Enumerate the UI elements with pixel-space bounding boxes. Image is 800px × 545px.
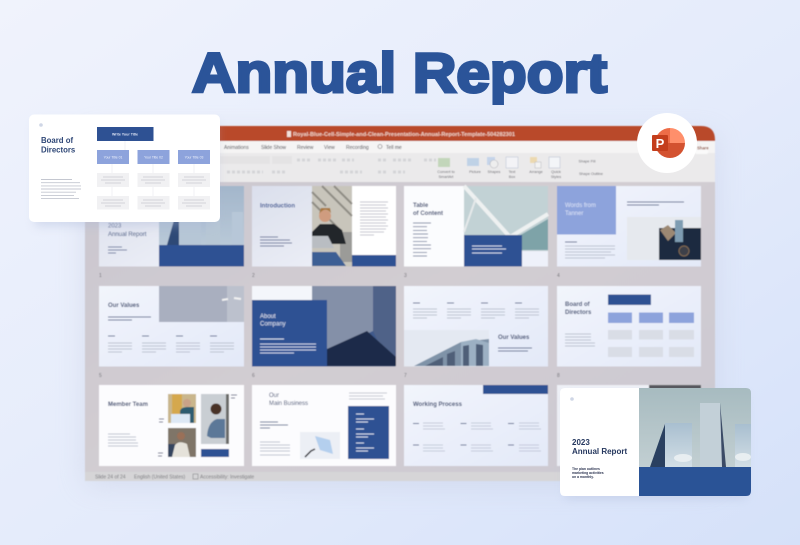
slide 4: words from tanner (557, 186, 701, 266)
title bar: Royal-Blue-Cell-Simple-and-Clean-Presentation-Annual-Report-Template-504282301 (293, 132, 515, 138)
powerpoint icon badge: P (656, 136, 665, 151)
slide 8: board of directors: Board of (565, 302, 591, 308)
slide number 4: 4 (557, 273, 560, 279)
ribbon: Animations (224, 145, 249, 151)
slide number 5: 5 (99, 373, 102, 379)
ribbon: Share (697, 146, 709, 150)
ribbon: Quick (551, 170, 561, 174)
card paragraph (41, 180, 81, 199)
floating card: 2023 annual report (560, 388, 751, 496)
slide 5: our values: Our Values (108, 303, 140, 309)
ribbon: View (324, 145, 335, 151)
ribbon: Convert to (437, 170, 455, 174)
powerpoint window (85, 126, 715, 481)
slide number 6: 6 (252, 373, 255, 379)
card heading: 2023 (572, 438, 590, 447)
card heading: Annual Report (572, 447, 627, 456)
card heading (572, 438, 627, 456)
org chart: Write Your Title (112, 132, 138, 136)
slide 1: 2023 annual report: Annual Report (108, 232, 147, 238)
title bar (85, 126, 715, 141)
ribbon: SmartArt (439, 175, 454, 179)
ribbon: Tell me (386, 145, 402, 151)
slide 7: our values alt: Our Values (498, 335, 530, 341)
ribbon: Review (297, 145, 314, 151)
slide 2: introduction: Introduction (260, 204, 295, 210)
card subtitle (572, 467, 604, 479)
slide number 8: 8 (557, 373, 560, 379)
powerpoint icon badge (637, 113, 697, 173)
slide 2: introduction (252, 186, 396, 266)
card subtitle: marketing activities (572, 471, 604, 475)
ribbon: Picture (469, 170, 481, 174)
card heading (41, 136, 76, 154)
slide 10: our main business: Our (269, 393, 279, 399)
ribbon: Text (509, 170, 516, 174)
status bar: Slide 24 of 24 (95, 474, 126, 480)
ribbon: Shape Outline (579, 172, 603, 176)
floating card: board of directors (29, 114, 220, 222)
slide 3: table of content: Table (413, 203, 429, 209)
ribbon: Arrange (529, 170, 543, 174)
slide 1: 2023 annual report (99, 186, 244, 266)
status bar (85, 472, 715, 481)
slide 8: board of directors (557, 286, 701, 366)
slide 6: about company: About (260, 314, 276, 320)
slide 6: about company: Company (260, 322, 286, 328)
slide 9: member team (99, 385, 244, 466)
slide 12: partial (557, 385, 701, 466)
slide number 7: 7 (404, 373, 407, 379)
slide 4: words from tanner: Tanner (565, 211, 583, 217)
slide 6: about company (252, 286, 396, 366)
slide 7: our values alt (404, 286, 548, 366)
window shadow (85, 135, 715, 485)
slide 10: our main business: Main Business (269, 401, 308, 407)
status bar: Accessibility: Investigate (200, 474, 254, 480)
slide 4: words from tanner: Words from (565, 203, 596, 209)
slide 8: board of directors: Directors (565, 310, 592, 316)
slide 5: our values (99, 286, 244, 366)
slide number 2: 2 (252, 273, 255, 279)
ribbon: Box (509, 175, 515, 179)
ribbon (85, 141, 715, 182)
status bar: English (United States) (134, 474, 185, 480)
card heading: Directors (41, 146, 76, 154)
ribbon: Recording (346, 145, 369, 151)
card subtitle: on a monthly. (572, 475, 594, 479)
card subtitle: The plan outlines (572, 467, 600, 471)
ribbon: Slide Show (261, 145, 286, 151)
ribbon: Shapes (488, 170, 501, 174)
slide 3: table of content: of Content (413, 211, 443, 217)
title: Annual Report (192, 41, 607, 104)
ribbon: Shape Fill (579, 160, 596, 164)
floating card shadow (35, 122, 217, 226)
org chart: Your Title 01 (104, 156, 122, 160)
slide 1: 2023 annual report: 2023 (108, 224, 122, 230)
slide 3: table of content (404, 186, 548, 266)
org chart: Your Title 03 (185, 156, 203, 160)
floating card shadow (565, 395, 747, 499)
slide number 3: 3 (404, 273, 407, 279)
org chart (97, 127, 210, 210)
building image (650, 403, 751, 467)
slide 11: working process: Working Process (413, 402, 463, 408)
card heading: Board of (41, 136, 73, 145)
slide number 1: 1 (99, 273, 102, 279)
window body (85, 126, 715, 481)
ribbon: Styles (551, 175, 561, 179)
slide 10: our main business (252, 385, 396, 466)
slide 9: member team: Member Team (108, 402, 148, 408)
org chart: Your Title 02 (144, 156, 163, 160)
slide 11: working process (404, 385, 548, 466)
